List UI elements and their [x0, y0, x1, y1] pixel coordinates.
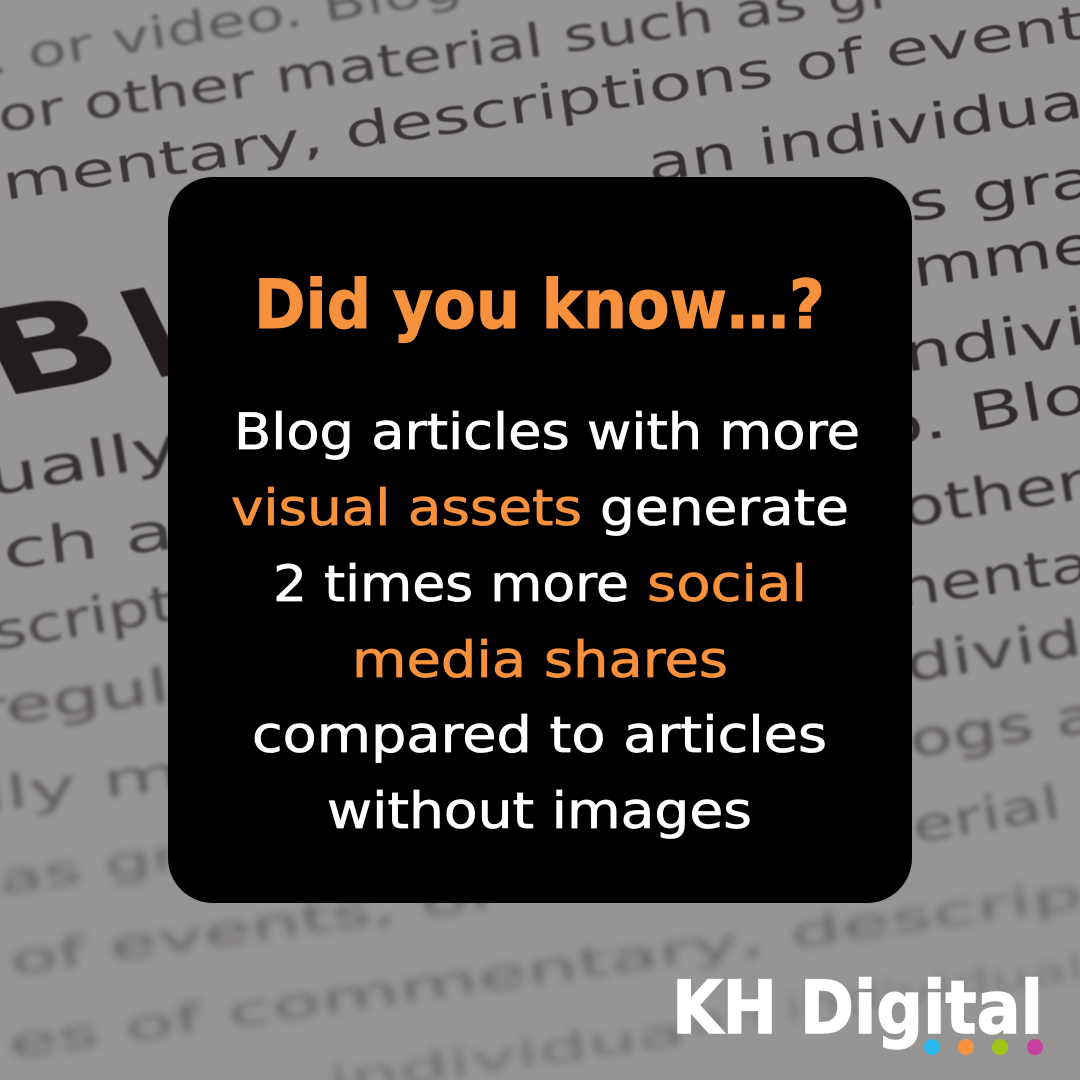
background: blurred blog text photo: ch a: [0, 501, 177, 582]
heading: Did you know: Did you know…?: [254, 266, 825, 345]
background: blurred blog text photo: nenta: [894, 534, 1080, 619]
background: blurred blog text photo: ogs a: [906, 687, 1080, 769]
background: blurred blog text photo: l: [99, 266, 210, 406]
background: blurred blog text photo: mentary, descriptions of event: [0, 0, 1080, 212]
background: blurred blog text photo: divid: [901, 609, 1080, 694]
text block: statistic: visual assets: [231, 479, 582, 537]
text block: statistic: compared to articles: [252, 706, 827, 764]
text block: statistic: Blog articles with more: [234, 403, 860, 461]
background: blurred blog text photo: an individua: [643, 71, 1080, 194]
background: blurred blog text photo: o. Blo: [872, 364, 1080, 461]
text block: statistic: generate: [600, 479, 849, 537]
text block: statistic: without images: [327, 782, 752, 840]
text block: statistic: media shares: [352, 631, 728, 689]
background: blurred blog text photo: ndivi: [899, 297, 1080, 385]
text block: statistic: [231, 403, 860, 840]
background: blurred blog text photo: or other material such as gr: [0, 0, 898, 143]
background: blurred blog text photo: erial: [908, 775, 1065, 854]
background: blurred blog text photo: of events, of: [7, 871, 500, 985]
panel: black callout card: [168, 177, 912, 903]
background: blurred blog text photo: mme: [908, 215, 1080, 300]
logo: KH Digital: KH Digital: [672, 966, 1043, 1051]
background: blurred blog text photo: an individual: [686, 948, 1080, 1044]
background: blurred blog text photo: es of commentary, descrip: [5, 871, 1080, 1068]
text block: statistic: 2 times more: [273, 555, 629, 613]
text block: statistic: social: [647, 555, 807, 613]
background: blurred blog text photo: other: [898, 452, 1080, 540]
background: blurred blog text photo: as gra: [858, 149, 1080, 241]
